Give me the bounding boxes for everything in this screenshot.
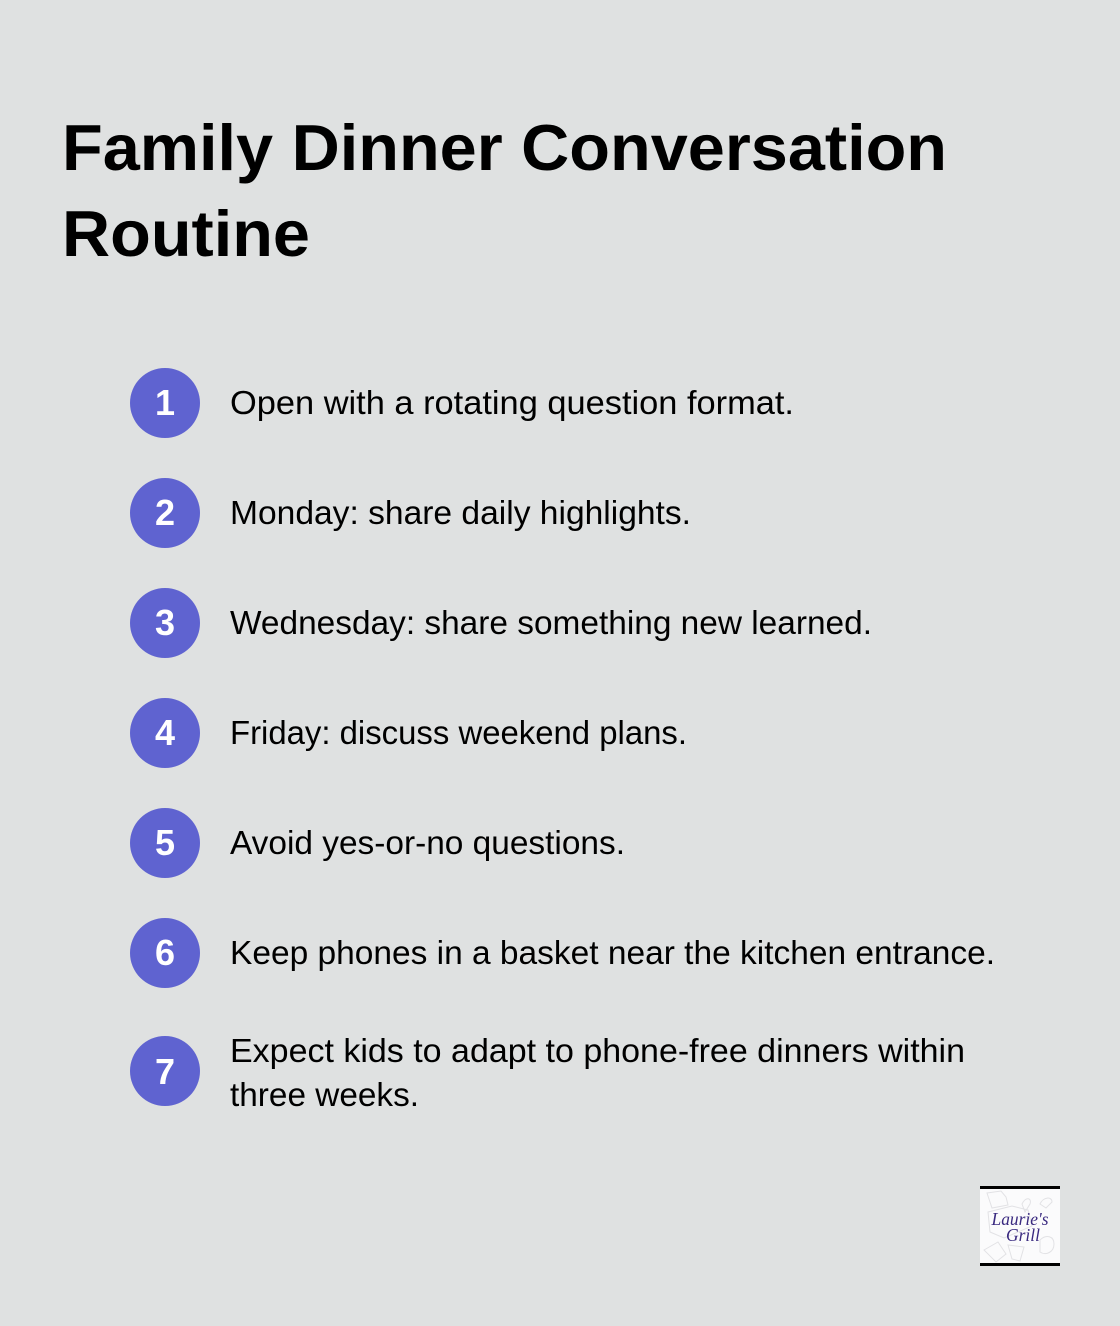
number badge 5: 5	[155, 822, 175, 863]
title: Family Dinner Conversation	[62, 111, 947, 184]
step 6	[130, 918, 995, 988]
logo: Laurie's Grill	[980, 1186, 1060, 1266]
number badge 2: 2	[155, 492, 175, 533]
number badge 2	[130, 478, 200, 548]
title	[62, 111, 947, 270]
number badge 4: 4	[155, 712, 175, 753]
logo: Laurie's Grill: Grill	[1006, 1225, 1040, 1245]
step 3 text: Wednesday: share something new learned.	[230, 604, 872, 641]
number badge 7: 7	[155, 1051, 175, 1092]
step 2	[130, 478, 691, 548]
number badge 1	[130, 368, 200, 438]
step 5 text: Avoid yes-or-no questions.	[230, 824, 625, 861]
step 3	[130, 588, 872, 658]
number badge 1: 1	[155, 382, 175, 423]
number badge 4	[130, 698, 200, 768]
step 4 text: Friday: discuss weekend plans.	[230, 714, 687, 751]
step 1	[130, 368, 794, 438]
step 5	[130, 808, 625, 878]
number badge 5	[130, 808, 200, 878]
step 7	[130, 1032, 965, 1113]
step 7 text: three weeks.	[230, 1076, 419, 1113]
number badge 6	[130, 918, 200, 988]
number badge 7	[130, 1036, 200, 1106]
number badge 3: 3	[155, 602, 175, 643]
number badge 6: 6	[155, 932, 175, 973]
title: Routine	[62, 197, 310, 270]
step 4	[130, 698, 687, 768]
step 7 text: Expect kids to adapt to phone-free dinners within	[230, 1032, 965, 1069]
step 1 text: Open with a rotating question format.	[230, 384, 794, 421]
logo: Laurie's Grill: Laurie's	[991, 1209, 1048, 1229]
step 2 text: Monday: share daily highlights.	[230, 494, 691, 531]
step 7 text	[230, 1032, 965, 1113]
number badge 3	[130, 588, 200, 658]
step 6 text: Keep phones in a basket near the kitchen entrance.	[230, 934, 995, 971]
